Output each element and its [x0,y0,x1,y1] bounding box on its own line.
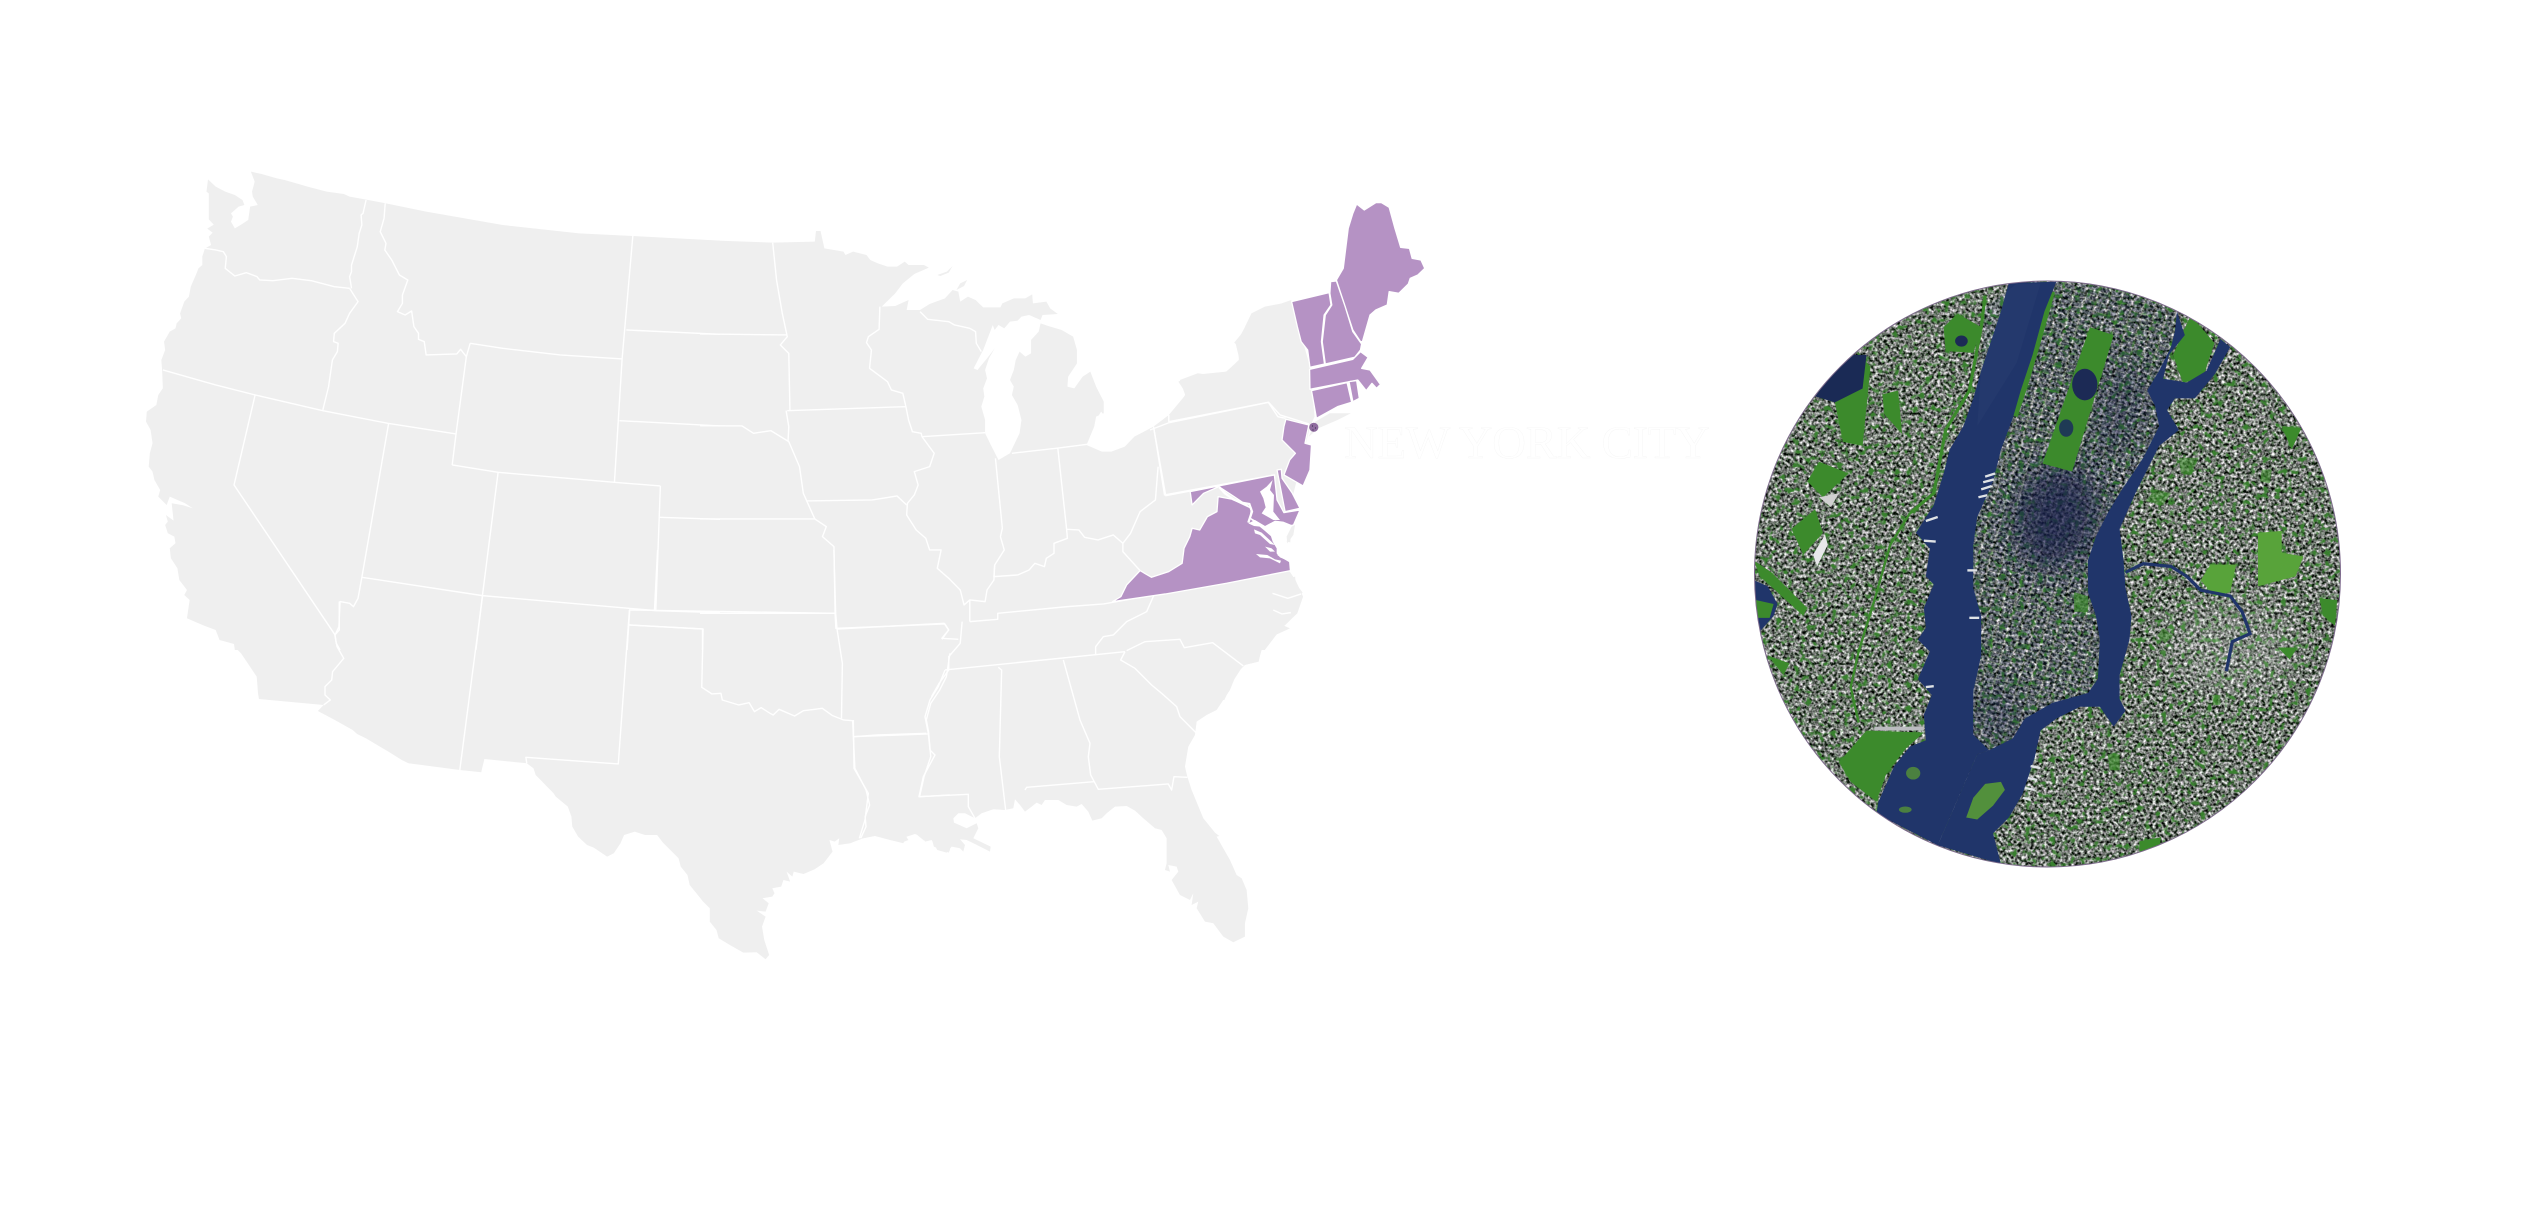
state: New Jersey [1282,419,1311,486]
satellite image of New York City in a circle [1750,278,2346,872]
scattered vegetation [1750,278,2346,872]
Chesapeake Bay and tidal rivers [1219,480,1295,563]
label: New York City: NEW YORK CITY [1344,417,1710,469]
state: Massachusetts [1310,352,1390,391]
bright industrial sites [1813,535,1828,566]
dark wetlands and reservoir [1815,355,1867,402]
highlighted states [1112,203,1425,602]
state: Rhode Island [1349,381,1359,402]
state: Maine [1336,203,1425,342]
Manhattan street grid and midtown shadows [1973,282,2301,750]
urban texture [1750,278,2346,872]
parks and green areas [1754,292,2337,853]
piers [1924,474,2041,800]
state: Vermont [1292,293,1331,367]
state borders [163,200,1309,838]
state: New Hampshire [1322,281,1362,364]
Governors Island [1966,782,2005,819]
marker: New York City location [1309,423,1318,432]
map: contiguous United States [146,172,1425,959]
land mass: grey states [146,172,1351,959]
state: Delaware [1277,469,1300,512]
Newark Bay [1754,580,1778,632]
Virginia eastern shore [1287,525,1295,543]
rivers and harbor [1876,282,2056,845]
state: Virginia [1112,497,1290,602]
circle outline [1754,281,2340,867]
state: Connecticut [1311,383,1352,418]
state: Maryland [1190,475,1300,528]
Ellis Island [1899,806,1912,813]
Newtown Creek [2126,564,2250,671]
Liberty Island [1906,767,1920,780]
